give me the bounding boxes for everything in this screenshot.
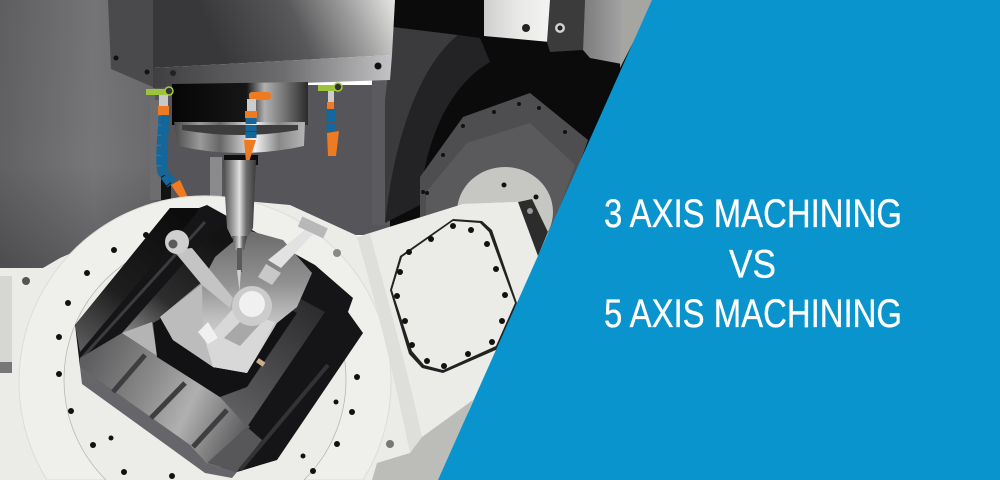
workpiece mount xyxy=(153,280,297,397)
lower pocket xyxy=(205,310,275,373)
title line: vs: VS xyxy=(729,242,776,286)
small fitting xyxy=(256,358,265,367)
hub xyxy=(232,286,272,326)
title xyxy=(604,192,902,336)
table bolts xyxy=(22,232,394,479)
raised plate xyxy=(122,222,247,356)
title line: 3 axis: 3 AXIS MACHINING xyxy=(604,192,902,236)
rotary table disc xyxy=(19,196,391,480)
swing arm over the disc xyxy=(357,199,552,480)
coolant hose right xyxy=(318,83,342,156)
t-slots xyxy=(113,355,227,447)
machine photo illustration xyxy=(0,0,655,480)
machined aluminium workpiece xyxy=(160,230,312,373)
tool holder and cutter xyxy=(223,160,256,291)
left wing xyxy=(160,284,215,368)
left rod xyxy=(173,248,233,308)
fixture body xyxy=(75,205,363,472)
coolant hose left xyxy=(146,87,190,204)
bright raised plate edge xyxy=(122,322,157,356)
connecting rod arms xyxy=(165,217,328,326)
billet xyxy=(160,230,312,373)
back wall xyxy=(0,0,390,300)
front sidewall xyxy=(80,367,237,478)
steel deck xyxy=(80,333,250,463)
title line: 5 axis: 5 AXIS MACHINING xyxy=(604,292,902,336)
dark bracket at arm corner xyxy=(518,199,548,256)
rotary axis hub xyxy=(420,93,588,257)
T-slot fixture plate xyxy=(75,205,363,478)
dark machine enclosure, right xyxy=(385,0,655,240)
right rod xyxy=(268,230,313,268)
dark top strip xyxy=(75,208,199,352)
dark right deck xyxy=(220,297,325,427)
white machine base xyxy=(0,197,552,480)
blue diagonal panel xyxy=(438,0,1000,480)
upper right housing xyxy=(484,0,655,68)
spindle head casing xyxy=(108,0,395,88)
coolant hose centre xyxy=(244,92,271,162)
spindle xyxy=(172,82,308,165)
octagonal access panel xyxy=(390,219,517,373)
